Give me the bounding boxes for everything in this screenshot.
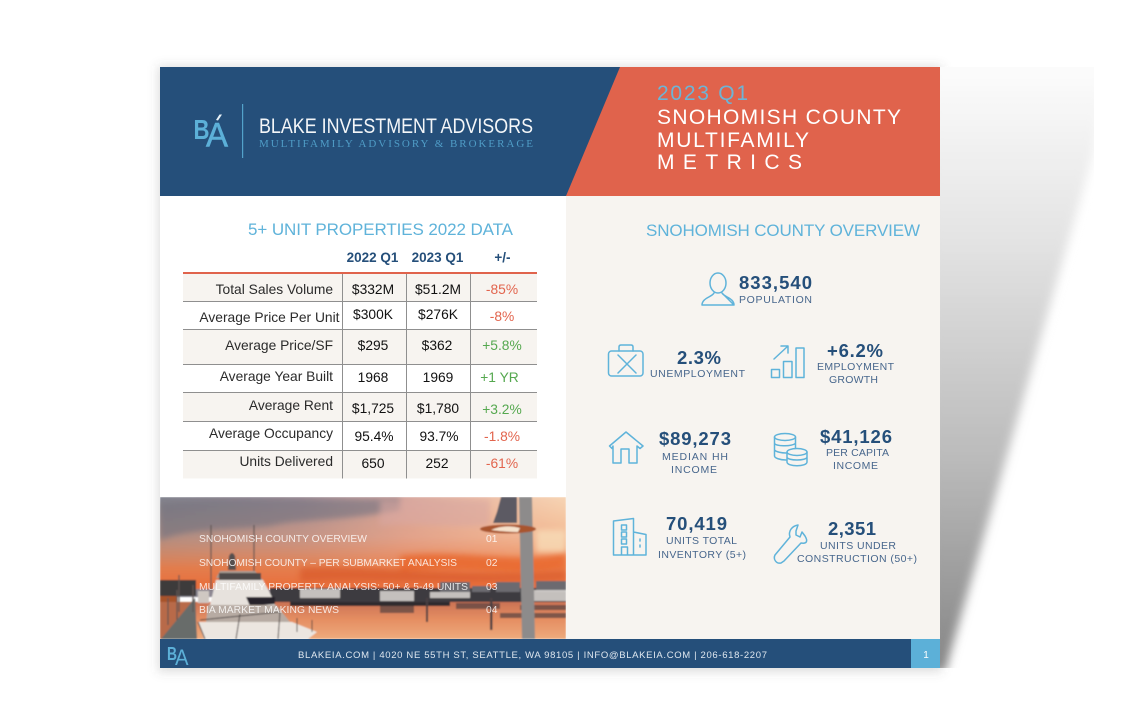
row: average year built: +1 YR bbox=[480, 370, 519, 385]
row: total sales volume: $332M bbox=[352, 282, 394, 297]
heading: 5+ unit properties: 5+ UNIT PROPERTIES 2022 DATA bbox=[248, 220, 514, 239]
stat: median household income bbox=[610, 428, 731, 476]
left shore bbox=[160, 580, 196, 596]
header accent panel bbox=[566, 67, 940, 196]
stat: employment growth: +6.2% bbox=[827, 340, 883, 361]
footer bar bbox=[160, 639, 940, 670]
row: average year built bbox=[220, 369, 519, 385]
toc item 2: 02 bbox=[486, 558, 498, 569]
stat: median household income: $89,273 bbox=[659, 428, 731, 449]
distant shore and marina bbox=[270, 588, 566, 602]
row: average rent bbox=[249, 398, 522, 417]
row: units delivered: Units Delivered bbox=[239, 454, 333, 469]
stat: population bbox=[702, 272, 812, 306]
row: units delivered: 650 bbox=[361, 456, 385, 471]
icon: house bbox=[610, 432, 643, 463]
footer logo bbox=[167, 644, 189, 670]
row: average rent: $1,780 bbox=[417, 401, 459, 416]
report title: METRICS bbox=[657, 151, 802, 174]
tagline: MULTIFAMILY ADVISORY & BROKERAGE bbox=[259, 138, 533, 150]
icon: wrench bbox=[774, 525, 807, 563]
stat: per capita income: $41,126 bbox=[820, 426, 892, 447]
stat: unemployment: 2.3% bbox=[677, 347, 721, 368]
report title: MULTIFAMILY bbox=[657, 129, 809, 152]
row: average occupancy bbox=[209, 426, 520, 444]
row: average occupancy: Average Occupancy bbox=[209, 426, 333, 441]
row: units delivered bbox=[239, 454, 518, 471]
toc item 1: SNOHOMISH COUNTY OVERVIEW bbox=[199, 534, 367, 545]
stat: per capita income: PER CAPITA bbox=[826, 447, 889, 459]
dock bbox=[161, 598, 197, 639]
row: average price per SF: +5.8% bbox=[482, 338, 522, 353]
stat: median household income: MEDIAN HH bbox=[662, 451, 728, 463]
stat: unemployment: UNEMPLOYMENT bbox=[650, 368, 746, 380]
page number box: 1 bbox=[923, 650, 929, 661]
heading: county overview: SNOHOMISH COUNTY OVERVIEW bbox=[646, 221, 920, 240]
table header: 2023 Q1 bbox=[412, 250, 464, 265]
row: average price per unit: -8% bbox=[490, 309, 514, 324]
icon: rising bars bbox=[772, 346, 804, 378]
row: average rent: $1,725 bbox=[352, 401, 394, 416]
yacht bbox=[198, 553, 317, 639]
icon: person bbox=[702, 273, 734, 305]
stat: units under construction: 2,351 bbox=[828, 518, 876, 539]
stat: units under construction bbox=[774, 518, 917, 565]
icon: BA monogram: B bbox=[194, 114, 210, 145]
stat: unemployment bbox=[608, 345, 746, 380]
row: average price per unit bbox=[199, 307, 514, 325]
table header bbox=[347, 250, 511, 265]
stat: population: POPULATION bbox=[739, 294, 812, 306]
row: average occupancy: 95.4% bbox=[354, 429, 394, 444]
page number box bbox=[911, 639, 940, 668]
data table bbox=[183, 250, 537, 478]
table header: +/- bbox=[494, 250, 511, 265]
report title bbox=[657, 82, 901, 174]
icon: BA monogram bbox=[194, 114, 228, 154]
row: average price per SF: $295 bbox=[358, 338, 389, 353]
row: average rent: Average Rent bbox=[249, 398, 333, 413]
stat: units under construction: UNITS UNDER bbox=[820, 540, 896, 552]
toc item 1: 01 bbox=[486, 534, 498, 545]
row: average year built: 1968 bbox=[358, 370, 389, 385]
icon: BA monogram: A bbox=[206, 116, 228, 154]
footer logo: B bbox=[167, 644, 177, 664]
company name: BLAKE INVESTMENT ADVISORS bbox=[259, 114, 533, 138]
toc item 4: 04 bbox=[486, 605, 498, 616]
stat: total inventory: INVENTORY (5+) bbox=[658, 549, 746, 561]
sky bbox=[160, 497, 566, 597]
row: total sales volume: -85% bbox=[486, 282, 518, 297]
row: average price per SF: Average Price/SF bbox=[225, 338, 333, 353]
stat: median household income: INCOME bbox=[671, 464, 717, 476]
footer logo: A bbox=[175, 645, 189, 670]
stat: population: 833,540 bbox=[739, 272, 812, 293]
panel: county overview background bbox=[566, 196, 940, 639]
toc item 4: BIA MARKET MAKING NEWS bbox=[199, 605, 339, 616]
lamp post bbox=[519, 497, 535, 639]
row: average year built: Average Year Built bbox=[220, 369, 333, 384]
toc item 4 bbox=[199, 605, 498, 616]
report title: SNOHOMISH COUNTY bbox=[657, 106, 901, 129]
toc item 2: SNOHOMISH COUNTY – PER SUBMARKET ANALYSIS bbox=[199, 558, 457, 569]
toc item 3: 03 bbox=[486, 582, 498, 593]
footer contact line: BLAKEIA.COM | 4020 NE 55TH ST, SEATTLE, WA 98105 | INFO@BLAKEIA.COM | 206-618-2207 bbox=[298, 650, 767, 661]
toc item 3: MULTIFAMILY PROPERTY ANALYSIS: 50+ & 5-49 UNITS bbox=[199, 582, 468, 593]
row: total sales volume bbox=[216, 282, 518, 297]
header banner bbox=[160, 67, 940, 196]
stat: total inventory: 70,419 bbox=[666, 513, 727, 534]
logo: Blake Investment Advisors bbox=[194, 104, 533, 158]
stat: units under construction: CONSTRUCTION (50+) bbox=[797, 553, 917, 565]
row: total sales volume: Total Sales Volume bbox=[216, 282, 333, 297]
icon: building bbox=[614, 518, 646, 555]
report page background bbox=[160, 67, 940, 668]
row: average rent: +3.2% bbox=[482, 402, 522, 417]
report title: 2023 Q1 bbox=[657, 82, 748, 105]
table of contents bbox=[199, 534, 498, 616]
toc item 1 bbox=[199, 534, 498, 545]
water bbox=[160, 602, 566, 639]
row: average price per unit: $300K bbox=[353, 307, 394, 322]
stat: total inventory bbox=[614, 513, 746, 561]
stat: employment growth: EMPLOYMENT bbox=[817, 361, 895, 373]
stat: per capita income bbox=[774, 426, 892, 472]
icon: briefcase bbox=[608, 345, 643, 376]
row: average price per SF: $362 bbox=[422, 338, 452, 353]
icon: coins bbox=[774, 434, 807, 466]
table header: 2022 Q1 bbox=[347, 250, 399, 265]
stat: per capita income: INCOME bbox=[833, 460, 878, 472]
row: average price per unit: Average Price Per Unit bbox=[199, 310, 340, 325]
photo: marina at sunset bbox=[160, 497, 566, 639]
row: average price per unit: $276K bbox=[418, 307, 459, 322]
row: units delivered: -61% bbox=[486, 456, 518, 471]
row: total sales volume: $51.2M bbox=[415, 282, 461, 297]
row: units delivered: 252 bbox=[425, 456, 449, 471]
stat: total inventory: UNITS TOTAL bbox=[666, 535, 737, 547]
stat: employment growth bbox=[772, 340, 895, 386]
row: average occupancy: 93.7% bbox=[419, 429, 459, 444]
row: average price per SF bbox=[225, 338, 522, 353]
row: average year built: 1969 bbox=[423, 370, 454, 385]
page drop shadow bbox=[158, 50, 1110, 672]
row: average occupancy: -1.8% bbox=[484, 429, 520, 444]
stat: employment growth: GROWTH bbox=[829, 374, 878, 386]
